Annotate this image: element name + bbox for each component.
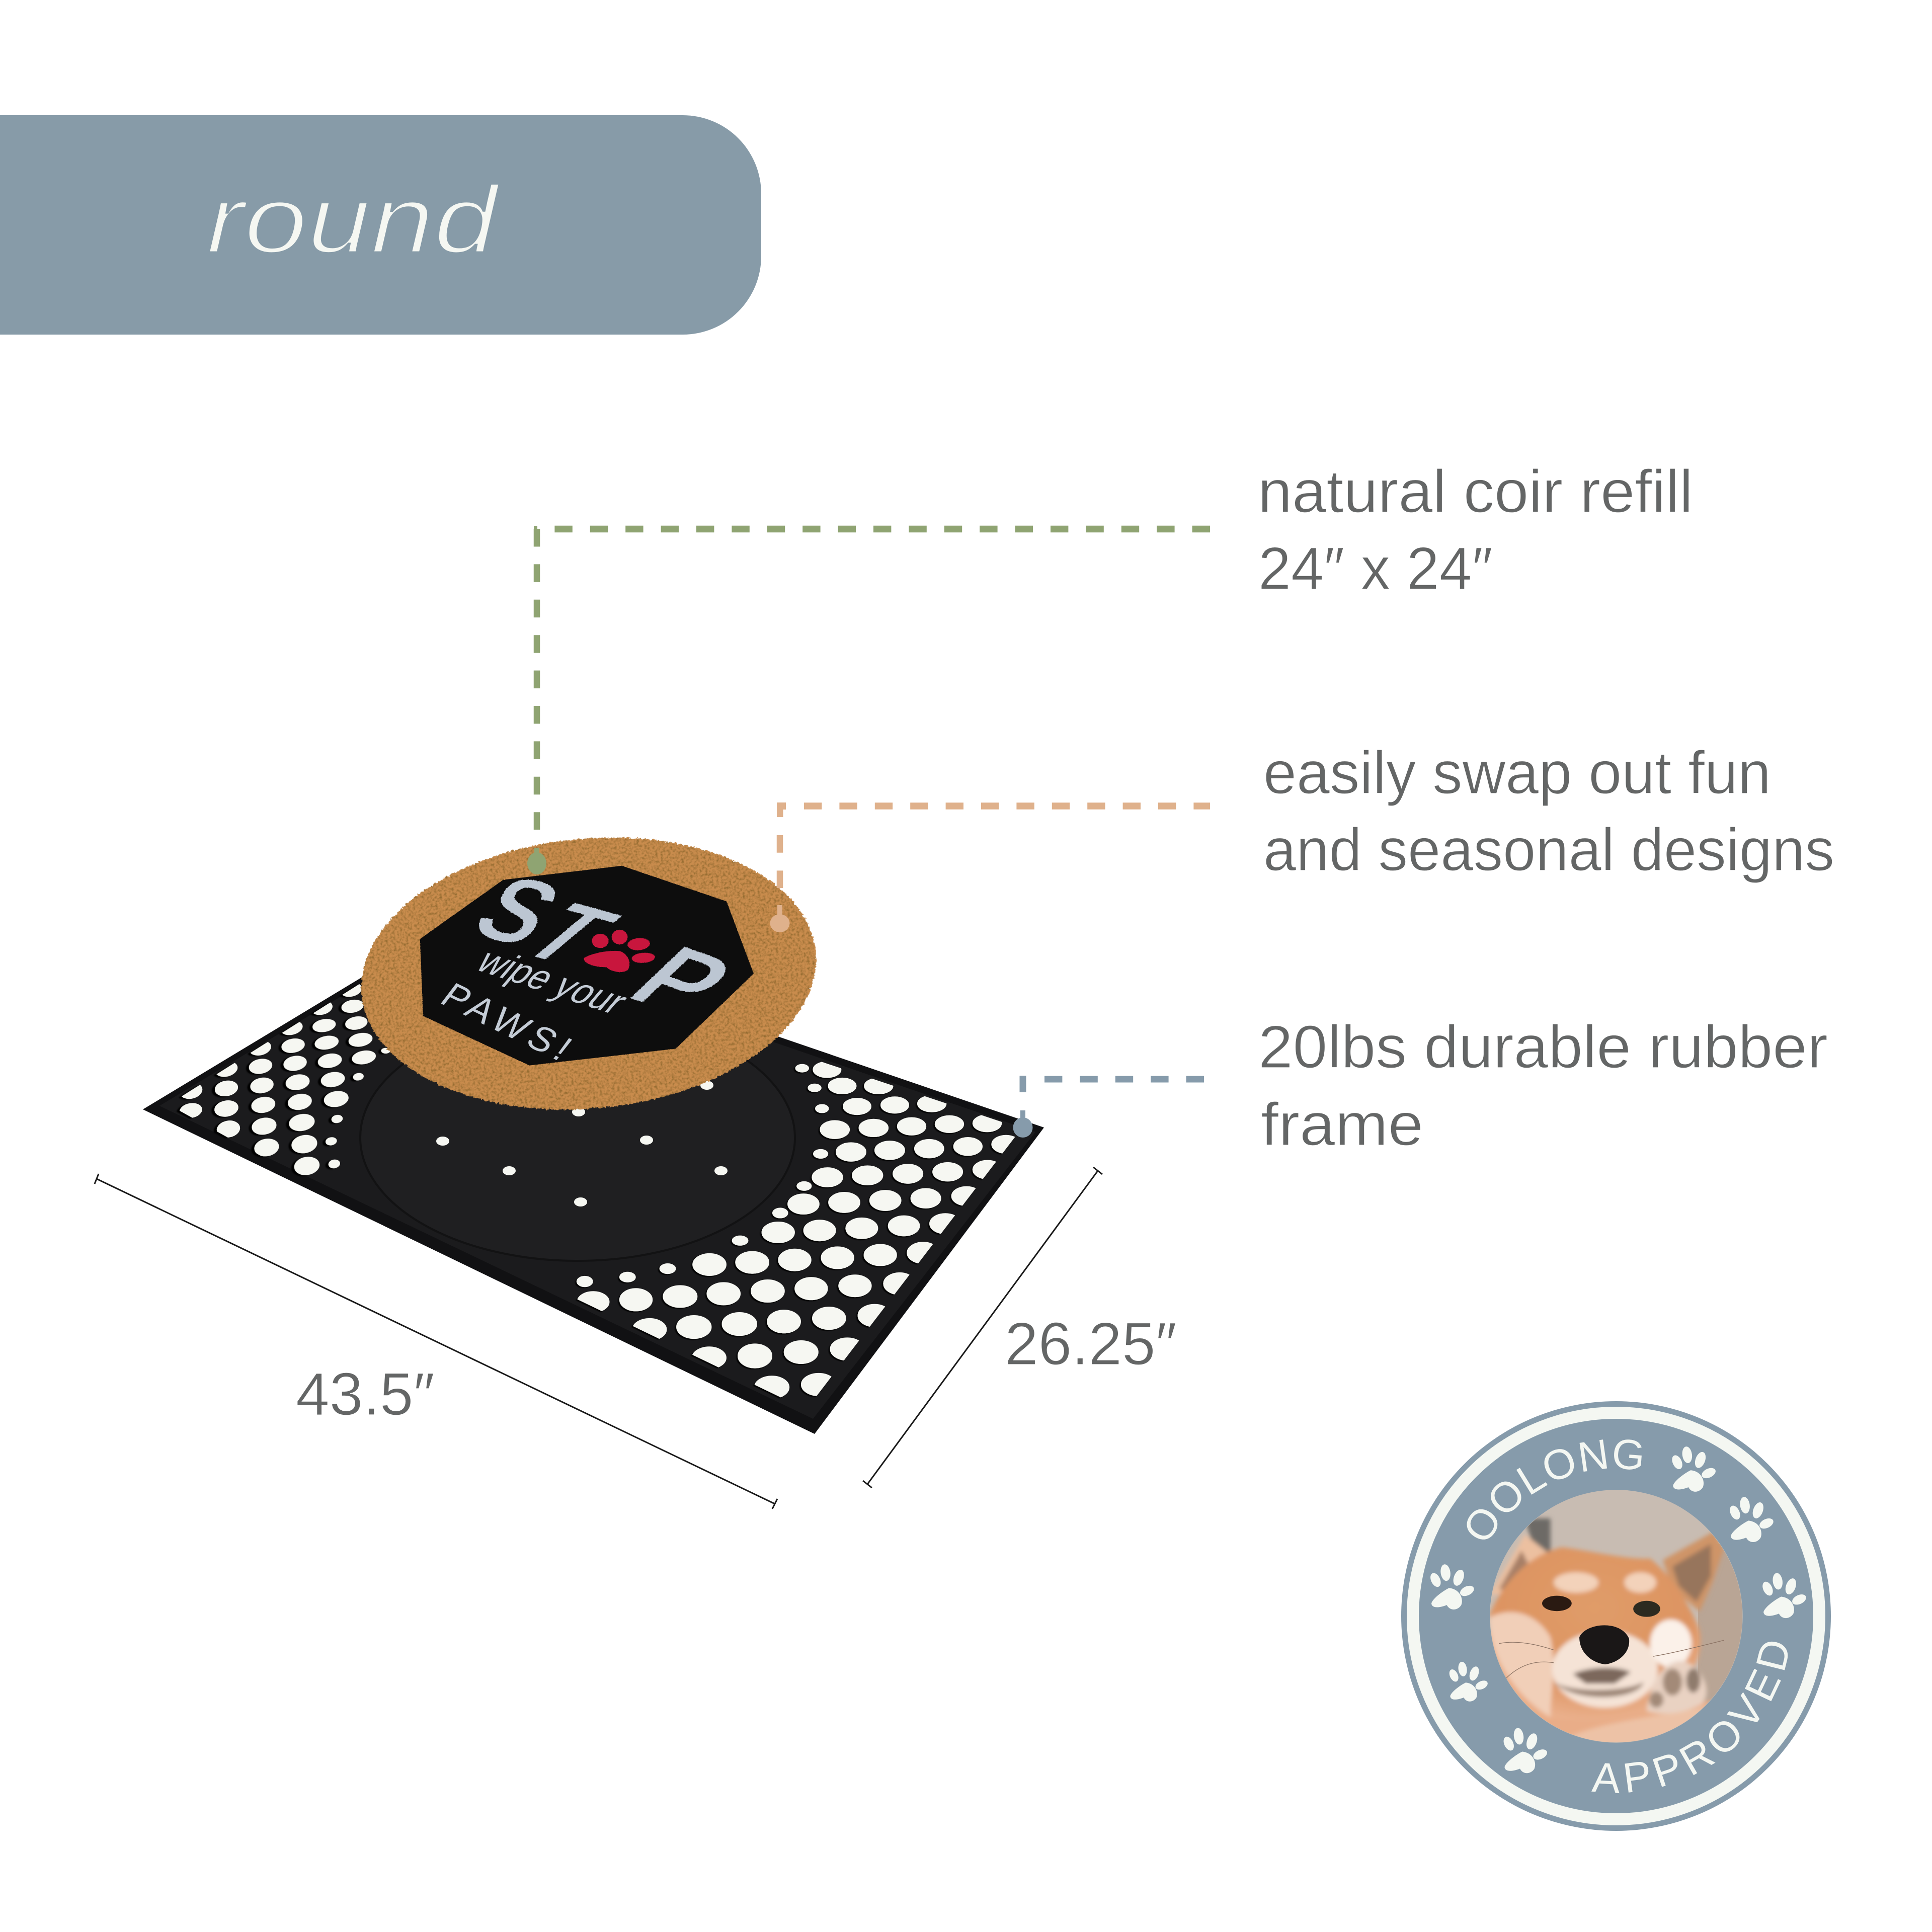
badge rings (1401, 1401, 1831, 1831)
right dot pattern (578, 1062, 1020, 1398)
label: easily swap out: easily swap out fun (1263, 739, 1771, 807)
inset disc (360, 1014, 795, 1261)
coir disc (349, 818, 829, 1130)
callout: orange line and pin (770, 802, 1210, 932)
STOP lettering: S (453, 855, 582, 967)
label: rubber frame: frame (1261, 1091, 1423, 1158)
mat inner surface (159, 931, 1035, 1419)
badge: Oolong approved (1401, 1401, 1831, 1831)
label: natural coir refill: 24″ x 24″ (1258, 535, 1493, 602)
label: easily swap out: and seasonal designs (1263, 816, 1834, 883)
dimension: depth line (863, 1167, 1102, 1488)
STOP lettering: P (605, 927, 757, 1035)
dimension label: 26.25: 26.25″ (1005, 1310, 1177, 1378)
label: natural coir refill (1258, 458, 1693, 602)
dimension: width line (95, 1174, 777, 1509)
STOP lettering (453, 855, 757, 1035)
disc drain holes (436, 1081, 728, 1206)
dimension label: 43.5: 43.5″ (296, 1360, 435, 1428)
black octagon (420, 866, 754, 1066)
label: natural coir refill: natural coir refill (1258, 458, 1693, 525)
label: rubber frame (1258, 1013, 1828, 1158)
label: easily swap out (1263, 739, 1834, 883)
left dot pattern (179, 981, 390, 1177)
label: rubber frame: 20lbs durable rubber (1258, 1013, 1828, 1081)
STOP lettering: T (496, 887, 642, 981)
badge paw icons (1428, 1446, 1808, 1773)
mat outer frame (143, 924, 1044, 1434)
wipe your text: wipe your (468, 941, 637, 1021)
badge text: OOLONG: OOLONG (1467, 1439, 1642, 1540)
PAWS text: PAWS! (433, 976, 580, 1068)
product: rubber mat frame (143, 977, 1044, 1434)
title: round: round (206, 167, 500, 273)
callout: green line and pin (527, 526, 1210, 874)
product: coir insert (349, 818, 829, 1130)
title banner (0, 115, 761, 335)
badge text: APPROVED: APPROVED (1591, 1641, 1788, 1793)
red paw print (584, 930, 656, 972)
callout: blue line and pin (1013, 1076, 1204, 1138)
dog photo (1490, 1490, 1743, 1743)
